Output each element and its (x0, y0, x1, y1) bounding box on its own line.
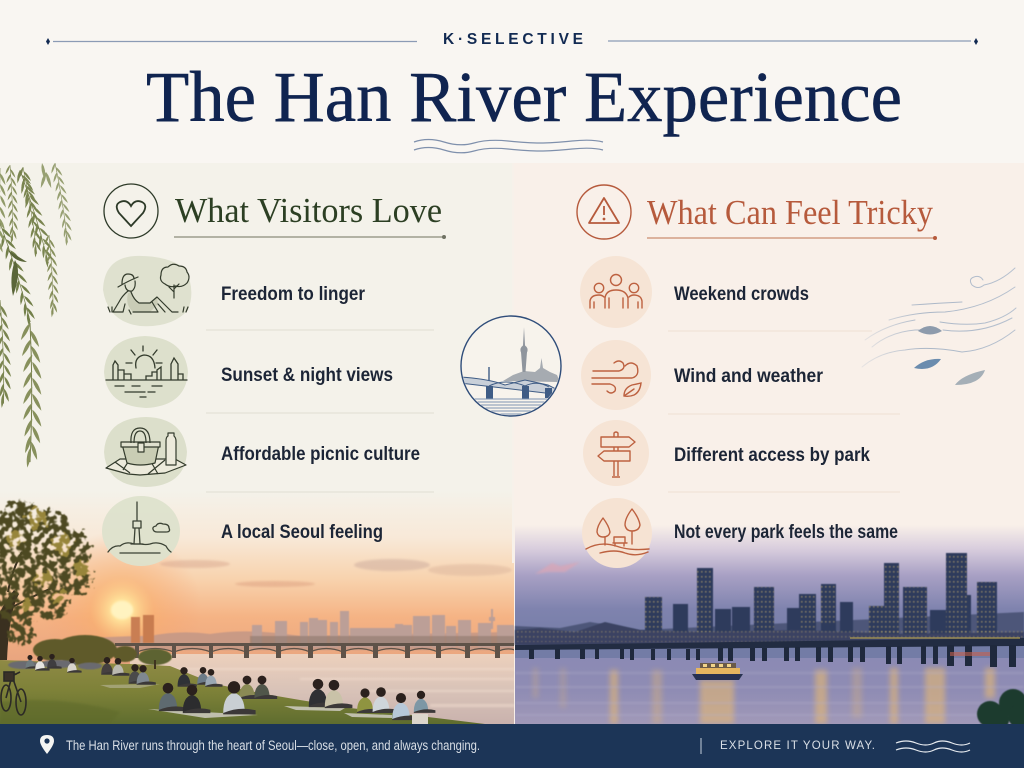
icon: seoul tower and cloud (102, 496, 180, 566)
item: weekend crowds: Weekend crowds (674, 284, 809, 305)
item: sunset and night views: Sunset & night views (221, 365, 393, 386)
icon: trees and bench (582, 498, 652, 568)
heading: what can feel tricky: What Can Feel Tricky (647, 193, 933, 232)
title: The Han River Experience (146, 57, 902, 137)
bicycle (1, 672, 26, 715)
icon: heart in circle (104, 184, 158, 238)
item: sunset and night views (104, 336, 393, 408)
footer bar: EXPLORE IT YOUR WAY. (720, 740, 875, 752)
icon: footer waves (896, 741, 970, 752)
photo: night skyline with ferry (515, 525, 1024, 729)
bridge piers (529, 645, 1016, 667)
icon: signpost (583, 420, 649, 486)
item: affordable picnic culture: Affordable picnic culture (221, 444, 420, 465)
item: a local seoul feeling: A local Seoul feeling (221, 522, 383, 543)
illustration: wind lines and blowing leaves (862, 268, 1016, 385)
icon: title waves (414, 140, 603, 153)
header rule with brand name (46, 31, 978, 48)
heading: what can feel tricky (577, 185, 937, 240)
heading: what visitors love: What Visitors Love (175, 191, 442, 230)
footer bar: The Han River runs through the heart of Seoul—close, open, and always changing. (66, 738, 480, 753)
ferry (692, 663, 743, 680)
photo: sunset picnic on the riverbank (0, 490, 515, 724)
item: different access by park (583, 420, 870, 486)
tree and shrubs (0, 501, 172, 669)
tree, lower right (977, 689, 1024, 729)
item: a local seoul feeling (102, 496, 383, 566)
icon: picnic basket and bottle (104, 417, 187, 487)
icon: group of people (580, 256, 652, 328)
item: freedom to linger (103, 256, 366, 326)
heading: what visitors love (104, 184, 446, 239)
footer bar (0, 724, 1024, 768)
item: freedom to linger: Freedom to linger (221, 284, 366, 305)
icon: sunset over skyline (104, 336, 188, 408)
item: wind and weather (581, 340, 824, 410)
icon: willow branches (0, 161, 76, 468)
item: different access by park: Different access by park (674, 445, 870, 466)
panel: what can feel tricky (512, 163, 1024, 729)
icon: warning triangle in circle (577, 185, 631, 239)
panel: what visitors love (0, 161, 515, 724)
item: affordable picnic culture (104, 417, 420, 487)
item: weekend crowds (580, 256, 809, 328)
header rule with brand name: K·SELECTIVE (443, 31, 583, 48)
picnickers (26, 654, 435, 724)
bridge arches and piers (137, 648, 515, 652)
icon: person relaxing by a tree (103, 256, 191, 326)
item: not every park feels the same (582, 498, 898, 568)
medallion: bridge and tower (460, 316, 562, 416)
icon: wind swirls and leaf (581, 340, 651, 410)
item: wind and weather: Wind and weather (674, 366, 824, 387)
item: not every park feels the same: Not every park feels the same (674, 522, 898, 543)
icon: location pin (40, 735, 54, 754)
